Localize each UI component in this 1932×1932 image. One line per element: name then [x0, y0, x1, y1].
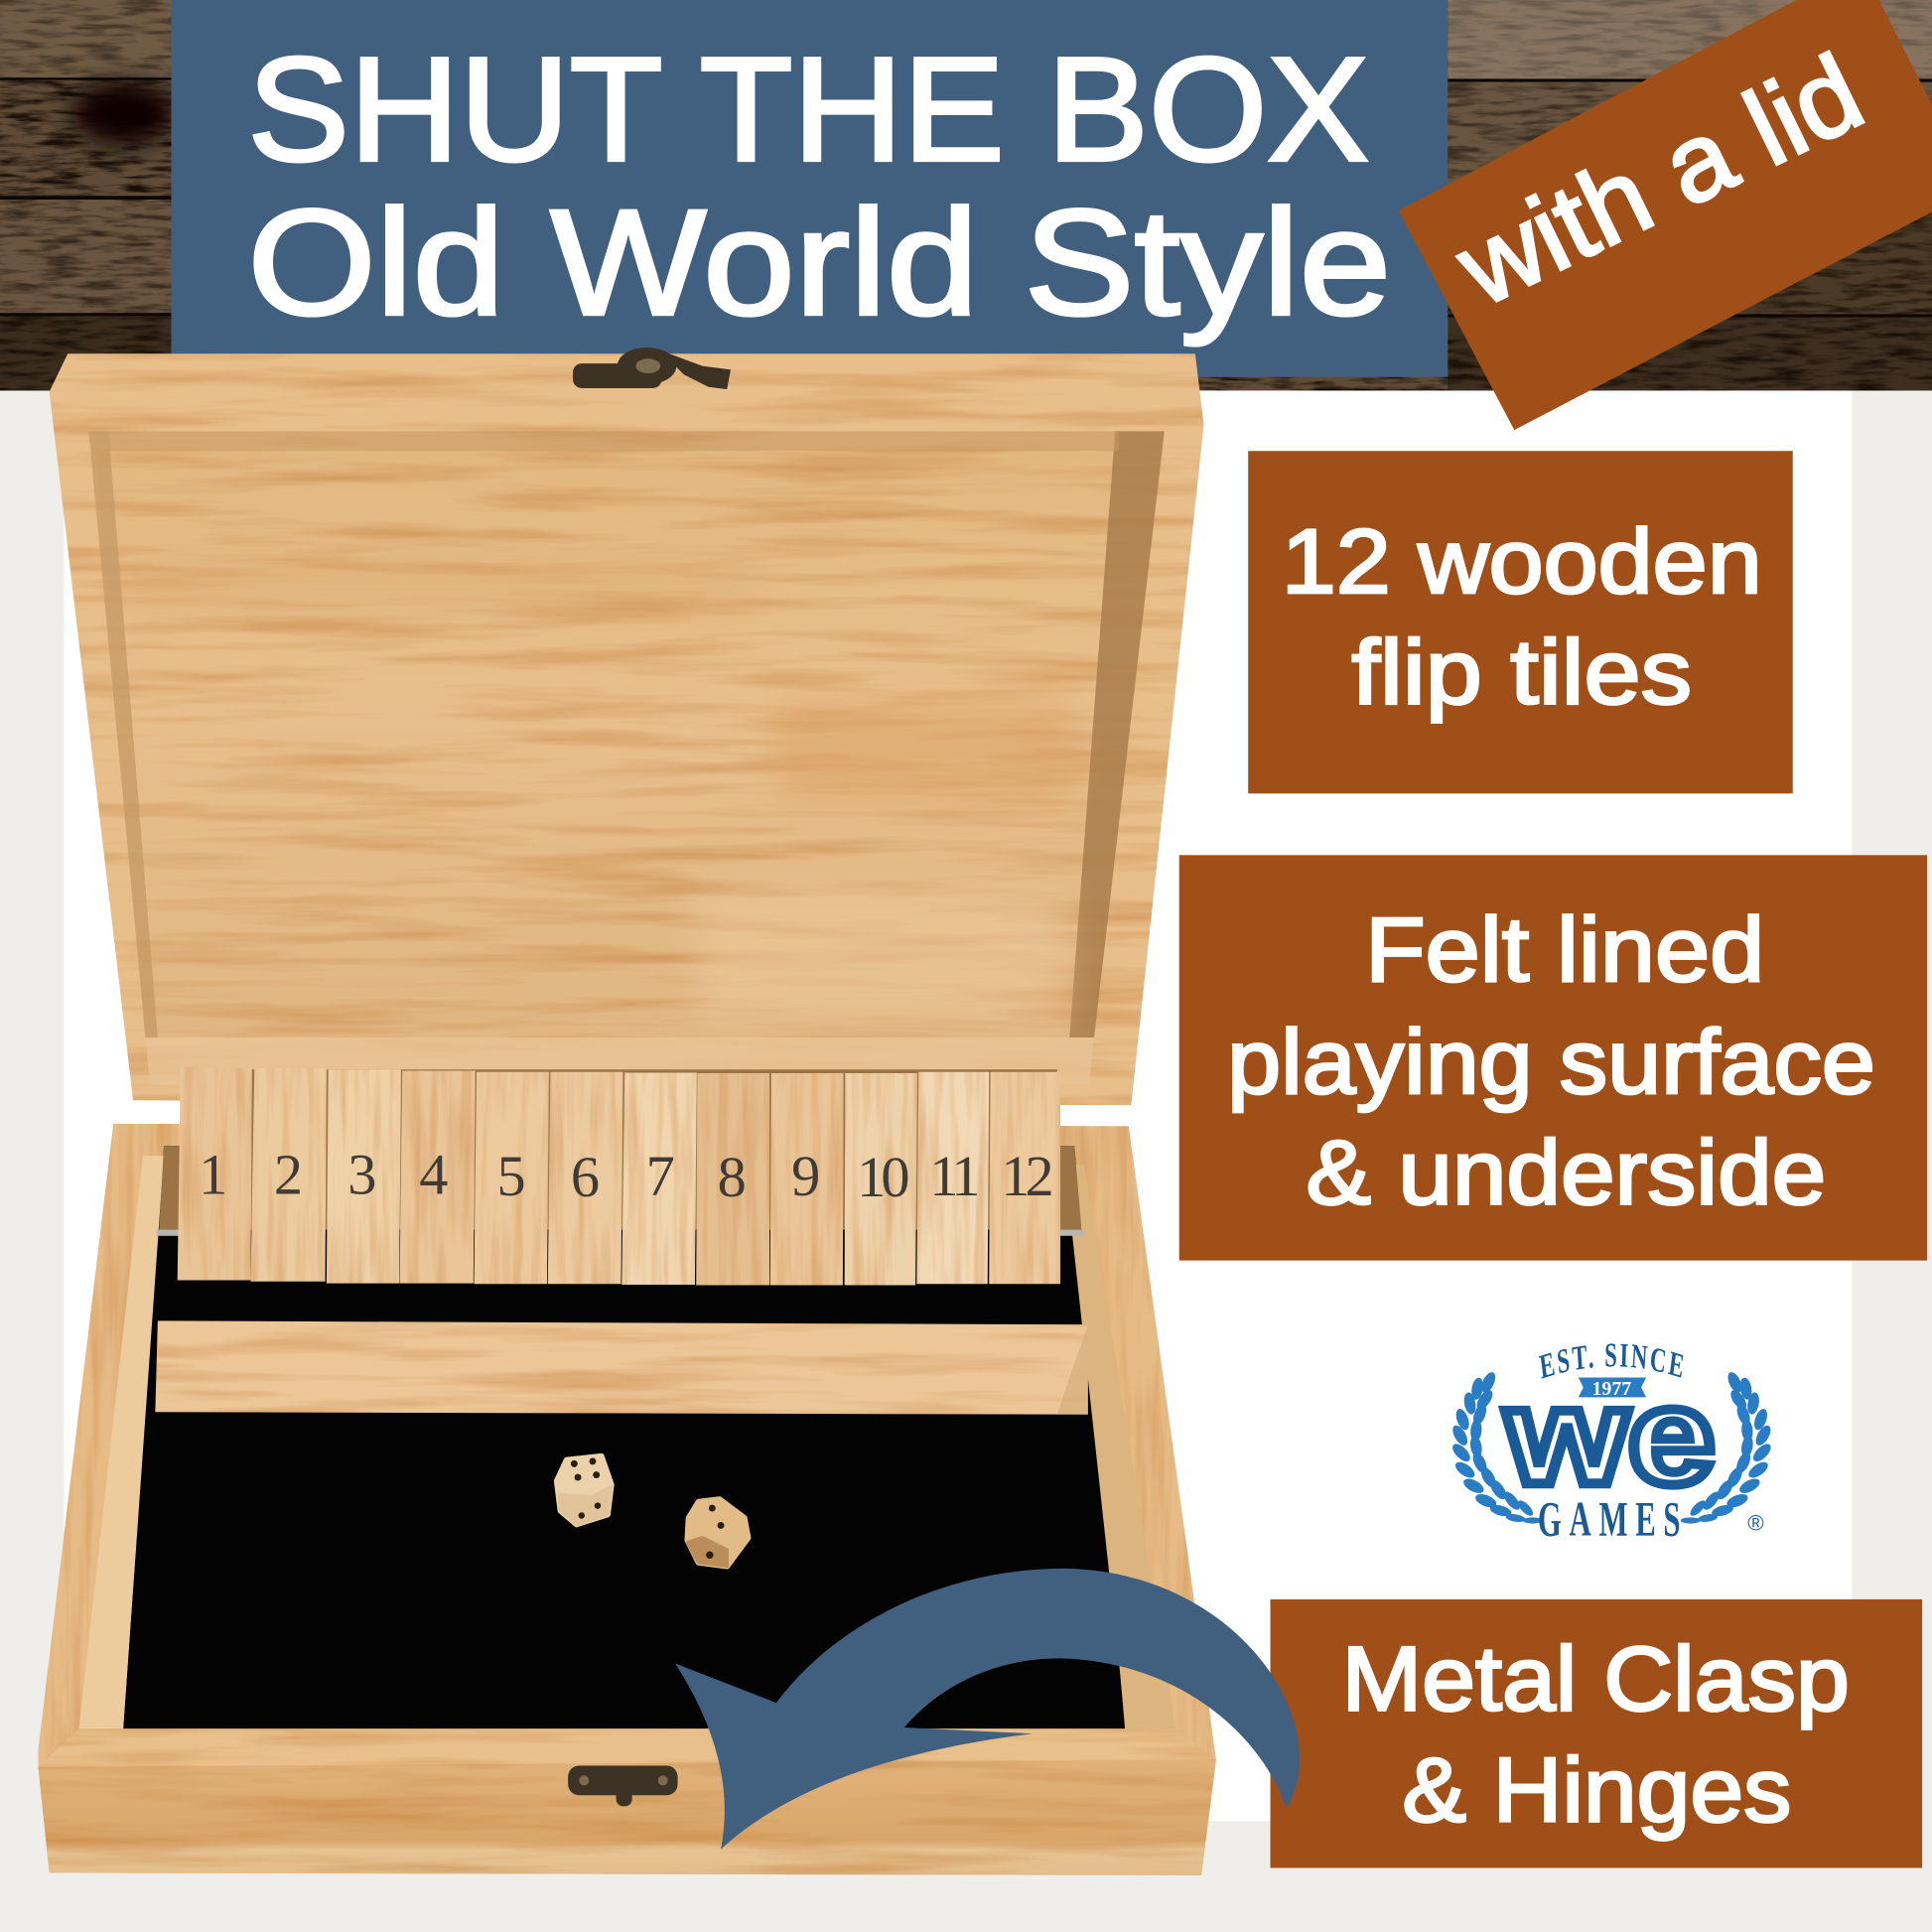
right inner wall: [1064, 1165, 1175, 1728]
die two: [688, 1499, 748, 1566]
title panel: [172, 0, 1448, 377]
tile 1: [178, 1067, 252, 1280]
box base with felt tray: [38, 1069, 1216, 1875]
left laurel: [1449, 1370, 1543, 1524]
games text: GAMES: [1538, 1491, 1688, 1546]
1977 ribbon: [1579, 1378, 1646, 1400]
tile 6: [548, 1072, 622, 1284]
felt playing surface: [123, 1146, 1125, 1728]
title text: Old World Style: [247, 179, 1391, 346]
tile 2: [250, 1068, 327, 1282]
tile 10: 10: [857, 1145, 907, 1209]
callout: metal clasp and hinges: Metal Clasp: [1342, 1629, 1850, 1730]
rustic wood plank banner: [0, 0, 1932, 390]
tile 8: [696, 1073, 769, 1285]
we wordmark: we: [1504, 1359, 1716, 1513]
1977 ribbon: 1977: [1591, 1378, 1631, 1400]
tile 11: [916, 1072, 989, 1284]
tile 4: [399, 1070, 476, 1284]
tile 11: 11: [929, 1144, 977, 1208]
metal rod: [157, 1230, 1084, 1236]
lid clasp hook: [573, 347, 731, 389]
tile 5: [474, 1072, 549, 1284]
tile 9: 9: [791, 1144, 820, 1208]
lid inner panel: [93, 431, 1165, 1037]
front rim: [38, 1728, 1216, 1767]
tile 1: 1: [199, 1143, 227, 1207]
front clasp: [568, 1765, 678, 1806]
tile 7: [621, 1072, 697, 1285]
callout: metal clasp and hinges: & Hinges: [1402, 1739, 1792, 1841]
left inner wall: [78, 1156, 164, 1728]
est since text: [1539, 1343, 1684, 1379]
tile 5: 5: [496, 1144, 526, 1208]
tile 4: 4: [419, 1143, 448, 1207]
callout: felt lined: [1179, 855, 1927, 1261]
right laurel: [1681, 1370, 1774, 1524]
tile 9: [770, 1073, 844, 1285]
tile 7: 7: [646, 1144, 675, 1208]
tile 3: [327, 1069, 401, 1284]
die one: [557, 1456, 612, 1524]
callout: 12 wooden flip tiles: flip tiles: [1351, 622, 1692, 724]
registered mark: ®: [1747, 1510, 1764, 1535]
est since text: EST. SINCE: [1539, 1343, 1684, 1379]
tile 12: 12: [1001, 1144, 1051, 1208]
title text: SHUT THE BOX: [247, 26, 1369, 192]
callout: 12 wooden flip tiles: [1248, 451, 1793, 793]
callout: 12 wooden flip tiles: 12 wooden: [1282, 511, 1762, 613]
shadowed wood behind tiles: [159, 1069, 1082, 1232]
callout: with a lid: [1399, 0, 1932, 430]
callout: felt lined: playing surface: [1227, 1012, 1875, 1113]
front face: [38, 1759, 1216, 1875]
curved arrow pointing at clasp: [675, 1569, 1300, 1850]
tile 12: [989, 1072, 1060, 1284]
callout: felt lined: & underside: [1307, 1123, 1826, 1224]
tile 2: 2: [274, 1143, 303, 1207]
tile 3: 3: [347, 1143, 376, 1207]
tile 8: 8: [718, 1145, 747, 1209]
open wooden box lid: [50, 347, 1204, 1105]
white content panel: [65, 390, 1852, 1821]
tile 10: [845, 1073, 917, 1285]
callout: felt lined: Felt lined: [1365, 899, 1764, 1001]
divider bar: [155, 1320, 1088, 1415]
title text: [247, 26, 1391, 346]
tile 6: 6: [571, 1145, 600, 1209]
callout: with a lid: with a lid: [1439, 32, 1880, 330]
WE Games logo: [1452, 1343, 1771, 1546]
callout: metal clasp and hinges: [1271, 1599, 1922, 1867]
